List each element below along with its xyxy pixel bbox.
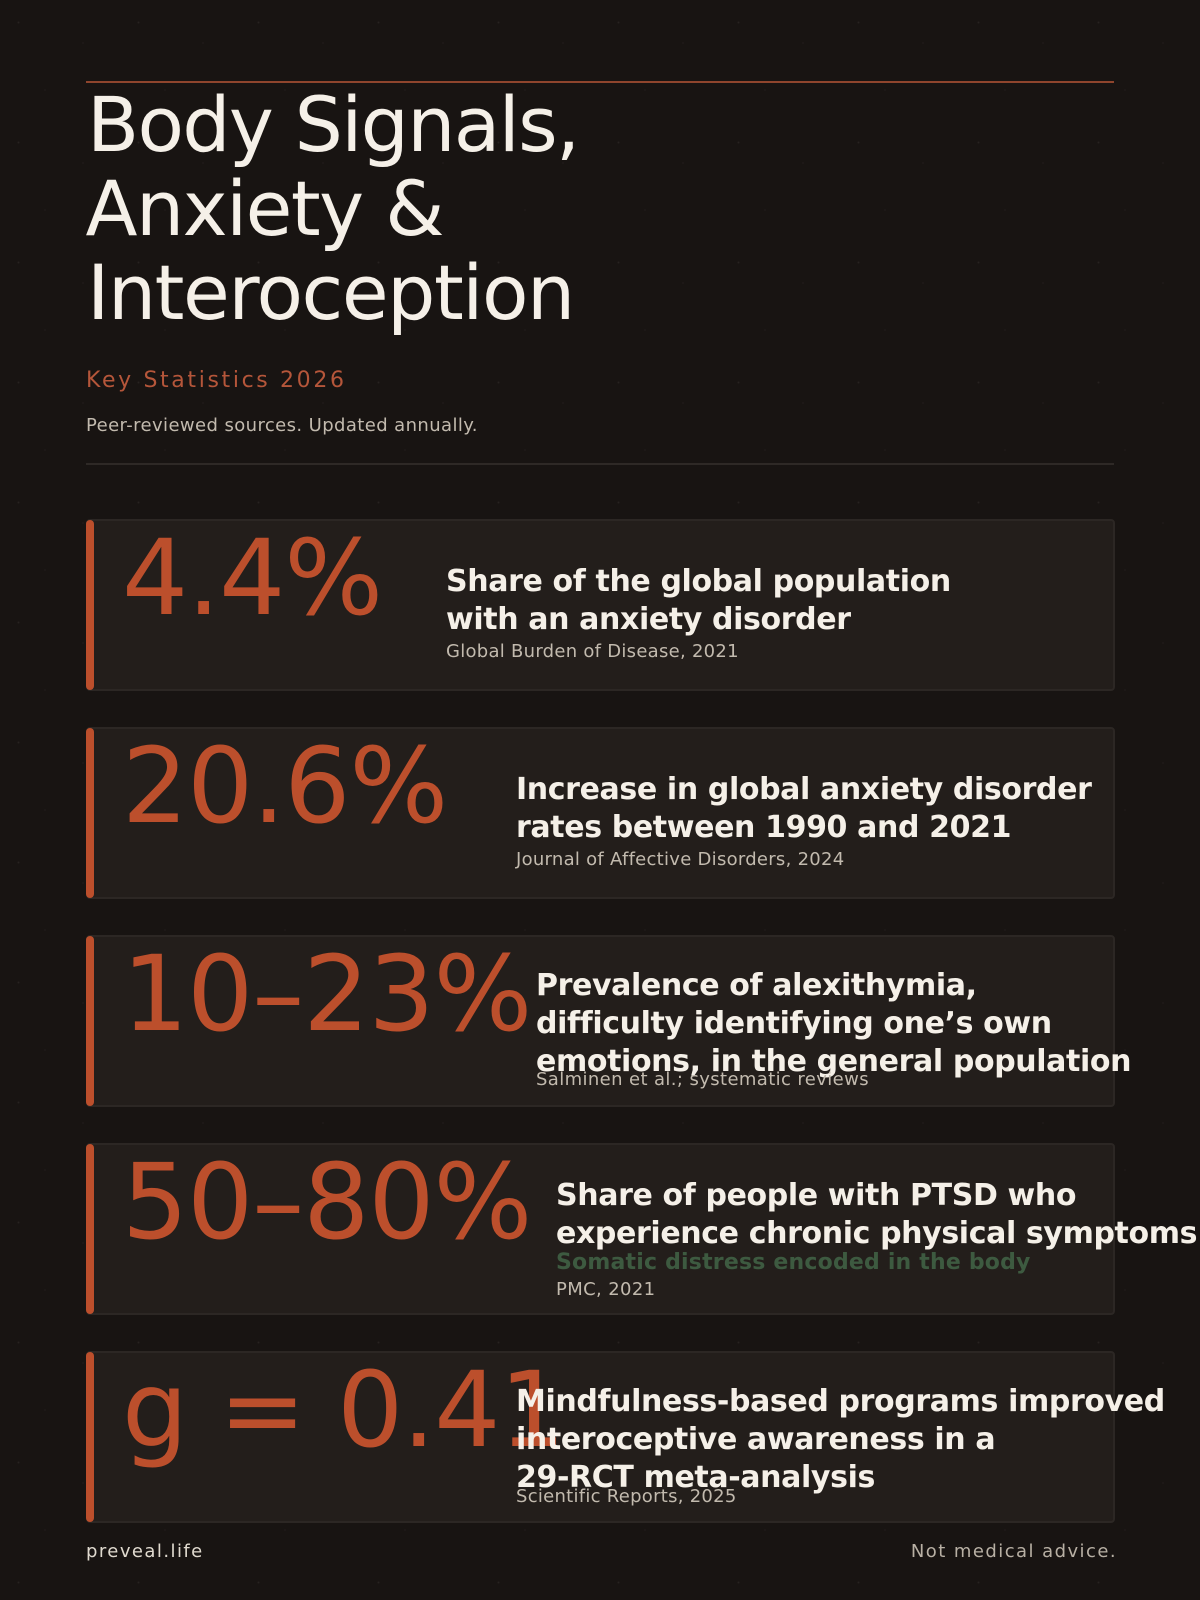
panel: stat 4.4% (86, 517, 1115, 691)
footer: brand: preveal.life (86, 1541, 204, 1562)
source: Salminen et al.; systematic reviews (536, 1069, 869, 1090)
descriptor: Peer-reviewed sources. Updated annually. (86, 415, 478, 436)
stat description: rates between 1990 and 2021 (516, 810, 1011, 845)
title: Anxiety & (86, 164, 443, 253)
stat number: 10–23% (122, 933, 531, 1055)
panel: stat 20.6% (86, 725, 1115, 899)
stat description: Mindfulness-based programs improved (516, 1384, 1165, 1419)
stat description (446, 564, 951, 637)
accent note: Somatic distress encoded in the body (556, 1250, 1031, 1275)
footer: disclaimer: Not medical advice. (911, 1541, 1117, 1562)
source: Journal of Affective Disorders, 2024 (516, 849, 844, 870)
stat description: interoceptive awareness in a (516, 1422, 995, 1457)
stat description (536, 968, 1131, 1079)
stat description (516, 1384, 1165, 1495)
title: Body Signals, (87, 80, 579, 169)
stat description: with an anxiety disorder (446, 602, 851, 637)
top accent rule (86, 81, 1114, 83)
title: Interoception (87, 248, 574, 337)
stat number: 20.6% (122, 725, 447, 847)
title (86, 80, 579, 337)
stat number: 50–80% (122, 1141, 531, 1263)
stat description: experience chronic physical symptoms (556, 1216, 1197, 1251)
stat number: 4.4% (122, 517, 382, 639)
stat number: g = 0.41 (122, 1349, 565, 1471)
source: Scientific Reports, 2025 (516, 1486, 737, 1507)
stat description: Increase in global anxiety disorder (516, 772, 1092, 807)
subtitle: Key Statistics 2026 (86, 368, 347, 393)
source: Global Burden of Disease, 2021 (446, 641, 739, 662)
stat description: difficulty identifying one’s own (536, 1006, 1052, 1041)
stat description: 29-RCT meta-analysis (516, 1460, 875, 1495)
header divider (86, 463, 1114, 465)
stat description: Share of people with PTSD who (556, 1178, 1076, 1213)
panel: stat 10–23% (86, 933, 1131, 1107)
stat description: emotions, in the general population (536, 1044, 1131, 1079)
source: PMC, 2021 (556, 1279, 655, 1300)
stat description: Prevalence of alexithymia, (536, 968, 977, 1003)
stat description (516, 772, 1092, 845)
stat description (556, 1178, 1197, 1251)
stat description: Share of the global population (446, 564, 951, 599)
